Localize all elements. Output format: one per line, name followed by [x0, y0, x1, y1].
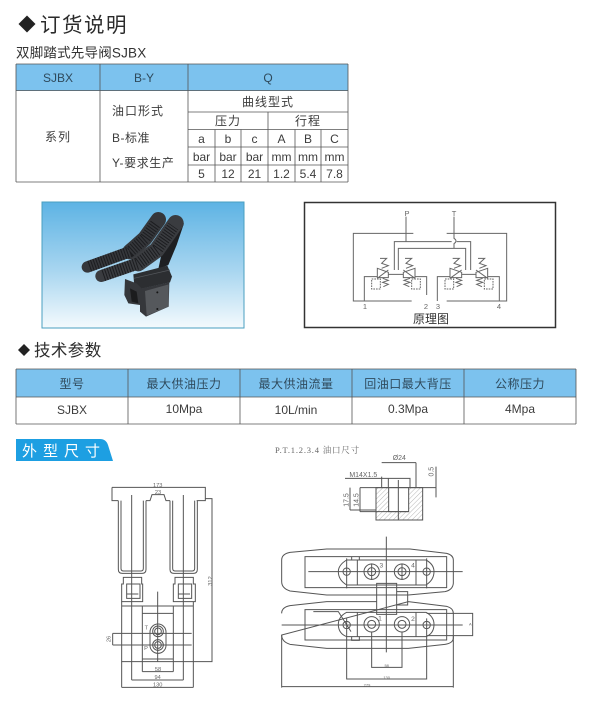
curve type values: 5: [198, 167, 205, 181]
parameter values row: 10L/min: [275, 403, 317, 417]
series column: 系列: [45, 130, 71, 144]
parameter header row: 型号: [59, 377, 85, 391]
upper mounting plate and ports: [338, 557, 434, 585]
dimension labels: 173: [153, 483, 162, 489]
parameter values row: 10Mpa: [166, 402, 203, 416]
port labels: 3: [436, 302, 440, 311]
pedal top plate: [112, 487, 205, 501]
parameter header row: 最大供油流量: [258, 377, 334, 391]
plan labels: 130: [383, 675, 391, 680]
right pedal arm: [170, 501, 197, 573]
plan labels: 58: [384, 663, 390, 668]
plan labels: 3: [379, 563, 383, 570]
curve type values: B: [304, 132, 312, 146]
curve type values: 行程: [295, 113, 321, 128]
curve type values: bar: [193, 150, 210, 164]
curve type values: 压力: [215, 114, 241, 128]
parameter header row: 最大供油压力: [146, 377, 222, 391]
curve type values: mm: [298, 150, 318, 164]
curve type values: mm: [324, 150, 344, 164]
hatched section block: [345, 463, 436, 520]
section dimension labels: M14X1.5: [349, 472, 377, 479]
pressure and tank lines: [394, 217, 471, 270]
section tab: outline dimensions: 外型尺寸: [22, 443, 106, 460]
dimension labels: 94: [155, 675, 161, 681]
back pedal: [87, 220, 158, 267]
drawing: port section: [343, 455, 436, 520]
plan labels: 1: [378, 615, 382, 622]
curve type values: 1.2: [273, 167, 290, 181]
section dimension labels: 17.5: [343, 493, 350, 507]
parameter header row: 公称压力: [495, 377, 545, 391]
centre lines and dimensions: [113, 495, 212, 687]
parameter values row: SJBX: [57, 403, 87, 417]
plan labels: 279: [364, 682, 371, 687]
table header row: SJBX: [43, 71, 73, 85]
dimension labels: 130: [153, 683, 162, 689]
valve 4: [476, 258, 493, 289]
curve type values: 7.8: [326, 167, 343, 181]
valve 3: [445, 258, 476, 289]
curve type values: b: [225, 132, 232, 146]
plan labels: 2: [411, 616, 415, 623]
linkages: [122, 577, 195, 602]
valve body: [122, 602, 193, 672]
drawing: plan view: [282, 537, 473, 688]
valve 1: [372, 258, 403, 289]
heading: ordering information: 订货说明: [40, 14, 128, 37]
curve type values: mm: [272, 150, 292, 164]
drawing: front view: [107, 483, 214, 689]
lower mounting plate and ports: [338, 612, 434, 640]
section dimension labels: 14.5: [354, 493, 361, 507]
dimension labels: 58: [155, 667, 161, 673]
centre connector: [377, 583, 408, 614]
plan labels: 4: [411, 562, 415, 569]
curve type values: A: [277, 132, 286, 146]
port type column: B-标准: [112, 131, 150, 145]
port labels: 2: [424, 302, 428, 311]
section dimension labels: [343, 455, 435, 507]
dimension labels: [107, 483, 214, 689]
parameter header row: 回油口最大背压: [364, 377, 452, 391]
table: ordering code: [16, 64, 348, 182]
valve 2: [403, 258, 420, 289]
curve type values: 21: [248, 167, 261, 181]
valve body: [124, 279, 169, 317]
left pedal arm: [118, 501, 146, 573]
valve head: [133, 266, 172, 289]
port labels: 1: [363, 302, 367, 311]
plan labels: [364, 562, 472, 687]
table header row: [16, 64, 348, 91]
dimension labels: T: [145, 625, 149, 631]
upper pedal outline: [282, 549, 453, 595]
centre lines and dimensions: [282, 537, 473, 688]
dimension labels: 26: [107, 636, 113, 642]
subheading: product name: 双脚踏式先导阀SJBX: [16, 46, 146, 60]
table header row: B-Y: [134, 71, 154, 85]
front pedal: [101, 223, 176, 276]
dimension labels: 23: [155, 490, 161, 496]
port labels: 4: [497, 302, 501, 311]
port type column: 油口形式: [112, 104, 164, 118]
parameter values row: 4Mpa: [505, 402, 535, 416]
curve type values: a: [198, 132, 205, 146]
curve type values: [193, 95, 344, 181]
curve type values: C: [330, 132, 339, 146]
product photo: dual foot pedal valve: [42, 202, 244, 328]
caption: port dimensions: P.T.1.2.3.4 油口尺寸: [275, 445, 360, 455]
support bracket: [158, 223, 184, 269]
curve type values: c: [252, 132, 258, 146]
port type column: [112, 104, 174, 170]
parameter values row: 0.3Mpa: [388, 402, 428, 416]
curve type values: 12: [221, 167, 235, 181]
parameter header row: [16, 369, 576, 397]
port type column: Y-要求生产: [112, 156, 174, 170]
parameter values row: [57, 402, 535, 417]
inner rectangles: [305, 557, 447, 640]
section dimension labels: Ø24: [393, 455, 406, 462]
port labels: T: [452, 209, 457, 218]
port labels: [363, 209, 501, 311]
dimension labels: P: [144, 646, 148, 652]
plan labels: A: [469, 622, 472, 627]
curve type values: bar: [219, 150, 237, 164]
output port lines: [364, 277, 499, 301]
section tab: outline dimensions: [16, 439, 113, 461]
port labels: P: [404, 209, 410, 218]
curve type values: bar: [246, 150, 263, 164]
outer return lines: [353, 233, 507, 301]
heading: technical parameters: 技术参数: [34, 341, 102, 360]
section dimension labels: 0.5: [428, 467, 435, 477]
table: technical parameters: [16, 369, 576, 424]
hydraulic schematic panel: [304, 202, 556, 328]
lower pedal outline: [282, 602, 453, 648]
dimension labels: 312: [208, 576, 214, 586]
curve type values: 曲线型式: [242, 95, 294, 109]
table header row: Q: [263, 71, 273, 85]
schematic caption: 原理图: [413, 312, 449, 326]
curve type values: 5.4: [300, 167, 317, 181]
